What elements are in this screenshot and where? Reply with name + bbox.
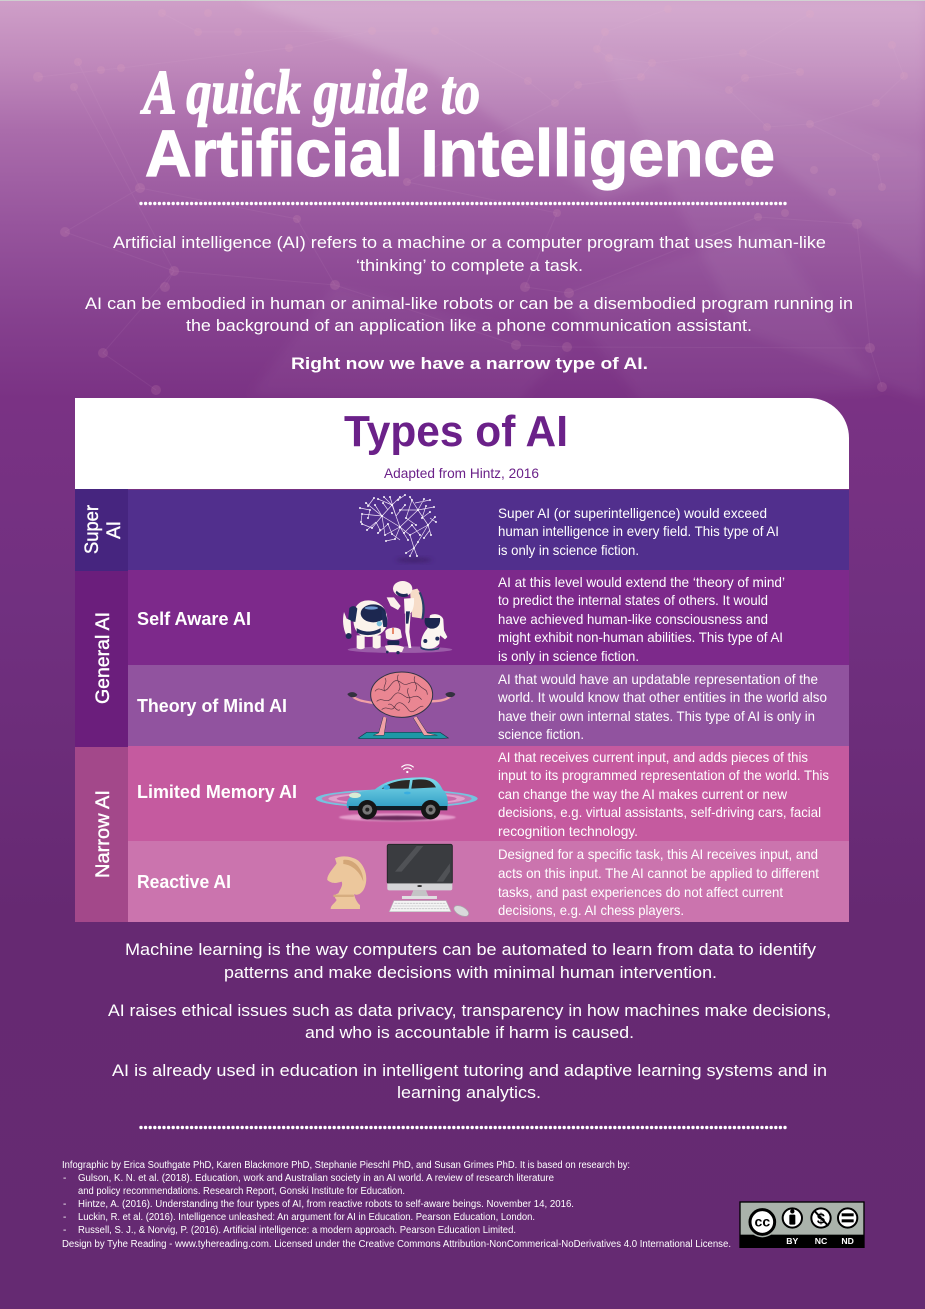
- icon: creative commons BY-NC-ND badge: NC: [815, 1236, 828, 1246]
- description: theory of mind AI: AI that would have an updatable representation of the: [498, 671, 818, 687]
- description: reactive AI: [498, 846, 819, 918]
- footer credits and references: -: [63, 1173, 66, 1184]
- description: super AI: is only in science fiction.: [498, 542, 639, 558]
- description: limited memory AI: input to its programmed representation of the world. This: [498, 767, 829, 783]
- panel: types of AI header: Types of AI: [344, 407, 568, 456]
- description: reactive AI: decisions, e.g. AI chess players.: [498, 902, 684, 918]
- closing text: AI raises ethical issues such as data privacy, transparency in how machines make decisions,: [108, 1001, 831, 1020]
- icon: creative commons BY-NC-ND badge: ND: [841, 1236, 854, 1246]
- panel: super AI row: [75, 489, 849, 571]
- intro text: Artificial intelligence (AI) refers to a machine or a computer program that uses human-like: [113, 233, 826, 252]
- panel: self aware AI row: [128, 570, 849, 665]
- intro text: Right now we have a narrow type of AI.: [291, 354, 648, 373]
- description: super AI: human intelligence in every field. This type of AI: [498, 523, 779, 539]
- footer credits and references: [62, 1160, 731, 1250]
- panel: theory of mind AI row: [128, 665, 849, 746]
- panel: types of AI header: [75, 398, 849, 489]
- description: theory of mind AI: have their own internal states. This type of AI is only in: [498, 708, 815, 724]
- description: limited memory AI: decisions, e.g. virtual assistants, self-driving cars, facial: [498, 804, 821, 820]
- closing text: patterns and make decisions with minimal human intervention.: [224, 963, 717, 982]
- panel: limited memory AI row: [128, 746, 849, 841]
- footer credits and references: Hintze, A. (2016). Understanding the four types of AI, from reactive robots to self-aware beings. November 14, 2016.: [78, 1199, 574, 1210]
- closing text: and who is accountable if harm is caused.: [305, 1023, 634, 1042]
- panel: narrow AI column: Narrow AI: [93, 790, 114, 878]
- description: theory of mind AI: [497, 671, 827, 742]
- description: self aware AI: [498, 574, 785, 664]
- description: reactive AI: tasks, and past experiences do not affect current: [498, 884, 783, 900]
- description: limited memory AI: can change the way the AI makes current or new: [498, 786, 788, 802]
- icon: chess knight: [327, 856, 366, 909]
- description: theory of mind AI: science fiction.: [498, 726, 584, 742]
- title: A quick guide to: [140, 59, 480, 127]
- panel: reactive AI row: Reactive AI: [137, 872, 231, 892]
- description: limited memory AI: recognition technology.: [498, 823, 638, 839]
- panel: types of AI header: Adapted from Hintz, 2016: [384, 465, 539, 481]
- icon: yoga brain: [347, 672, 455, 739]
- intro text: the background of an application like a phone communication assistant.: [186, 316, 752, 335]
- panel: self aware AI row: Self Aware AI: [137, 609, 251, 629]
- footer credits and references: and policy recommendations. Research Report, Gonski Institute for Education.: [78, 1186, 405, 1197]
- footer credits and references: Russell, S. J., & Norvig, P. (2016). Artificial intelligence: a modern approach. Pearson Education Limited.: [78, 1225, 516, 1236]
- description: limited memory AI: [498, 749, 829, 839]
- footer credits and references: Infographic by Erica Southgate PhD, Karen Blackmore PhD, Stephanie Pieschl PhD, and Susan Grimes PhD. It is based on research by:: [62, 1160, 630, 1171]
- icon: connected car: [316, 765, 478, 821]
- icon: robots: [343, 581, 452, 654]
- title: [140, 59, 775, 190]
- description: theory of mind AI: world. It would know that other entities in the world also: [497, 689, 827, 705]
- panel: theory of mind AI row: Theory of Mind AI: [137, 696, 287, 716]
- description: reactive AI: acts on this input. The AI cannot be applied to different: [498, 865, 819, 881]
- footer credits and references: -: [63, 1212, 66, 1223]
- description: reactive AI: Designed for a specific task, this AI receives input, and: [498, 846, 818, 862]
- label: Super AI: Super: [82, 504, 103, 554]
- footer credits and references: -: [63, 1225, 66, 1236]
- description: self aware AI: is only in science fiction.: [498, 648, 639, 664]
- icon: creative commons BY-NC-ND badge: [740, 1202, 864, 1247]
- intro text: AI can be embodied in human or animal-like robots or can be a disembodied program running in: [85, 294, 853, 313]
- footer credits and references: -: [63, 1199, 66, 1210]
- icon: creative commons BY-NC-ND badge: cc: [755, 1214, 770, 1230]
- closing text: [108, 940, 831, 1102]
- description: super AI: [498, 505, 779, 558]
- description: limited memory AI: AI that receives current input, and adds pieces of this: [498, 749, 808, 765]
- closing text: learning analytics.: [397, 1083, 541, 1102]
- panel: reactive AI row: [128, 841, 849, 922]
- panel: narrow AI column: [75, 747, 128, 922]
- icon: network brain: [360, 495, 436, 562]
- icon: creative commons BY-NC-ND badge: $: [817, 1211, 825, 1227]
- label: Super AI: AI: [104, 521, 125, 539]
- description: self aware AI: might exhibit non-human abilities. This type of AI: [498, 629, 783, 645]
- description: self aware AI: have achieved human-like consciousness and: [498, 611, 768, 627]
- description: super AI: Super AI (or superintelligence) would exceed: [498, 505, 767, 521]
- panel: general AI column: General AI: [93, 612, 114, 704]
- closing text: Machine learning is the way computers can be automated to learn from data to identify: [125, 940, 817, 959]
- label: Super AI: [82, 504, 125, 554]
- icon: desktop computer: [387, 844, 470, 919]
- footer credits and references: Design by Tyhe Reading - www.tyhereading.com. Licensed under the Creative Commons Attribution-NonCommerical-NoDerivatives 4.0 International License.: [62, 1239, 731, 1250]
- closing text: AI is already used in education in intelligent tutoring and adaptive learning systems and in: [112, 1061, 827, 1080]
- icon: creative commons BY-NC-ND badge: BY: [786, 1236, 799, 1246]
- intro text: ‘thinking’ to complete a task.: [356, 256, 583, 275]
- description: self aware AI: AI at this level would extend the ‘theory of mind’: [498, 574, 785, 590]
- panel: general AI column: [75, 571, 128, 747]
- panel: limited memory AI row: Limited Memory AI: [137, 782, 297, 802]
- footer credits and references: Luckin, R. et al. (2016). Intelligence unleashed: An argument for AI in Education. Pearson Education, London.: [78, 1212, 535, 1223]
- footer credits and references: Gulson, K. N. et al. (2018). Education, work and Australian society in an AI world. A review of research literature: [78, 1173, 554, 1184]
- intro text: [85, 233, 853, 373]
- title: Artificial Intelligence: [145, 116, 775, 190]
- description: self aware AI: to predict the internal states of others. It would: [498, 592, 768, 608]
